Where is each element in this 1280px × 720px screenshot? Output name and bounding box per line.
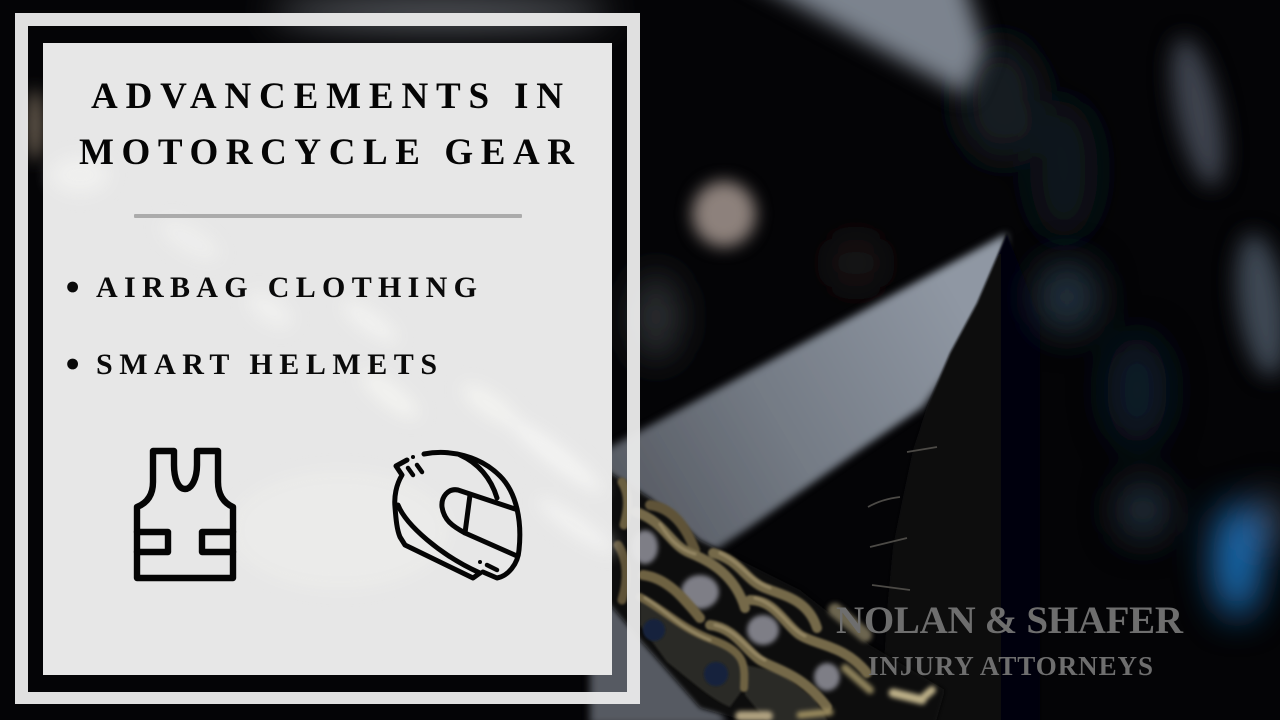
watermark: firm name: NOLAN & SHAFER [836,599,1184,642]
dark tire [880,233,1040,720]
bullet list [67,271,477,381]
chain plates [640,596,830,720]
bullet: smart helmets: SMART HELMETS [96,348,437,381]
title [79,76,575,173]
gray blurred band [590,233,1007,720]
chain gold edges [618,482,867,707]
icon: airbag vest [137,451,233,578]
divider [134,214,522,218]
bullet: airbag clothing: AIRBAG CLOTHING [96,271,477,304]
chain blurred front links [740,610,932,716]
panel reflection of chain [50,155,618,590]
icon: motorcycle helmet [395,452,520,578]
content panel [43,43,618,675]
outer translucent white frame [15,13,640,704]
watermark: firm name [836,599,1184,681]
tire stitches [868,447,937,590]
title: MOTORCYCLE GEAR [79,132,575,173]
chain [606,470,945,720]
watermark: firm name: INJURY ATTORNEYS [868,651,1153,681]
title: ADVANCEMENTS IN [91,76,563,117]
